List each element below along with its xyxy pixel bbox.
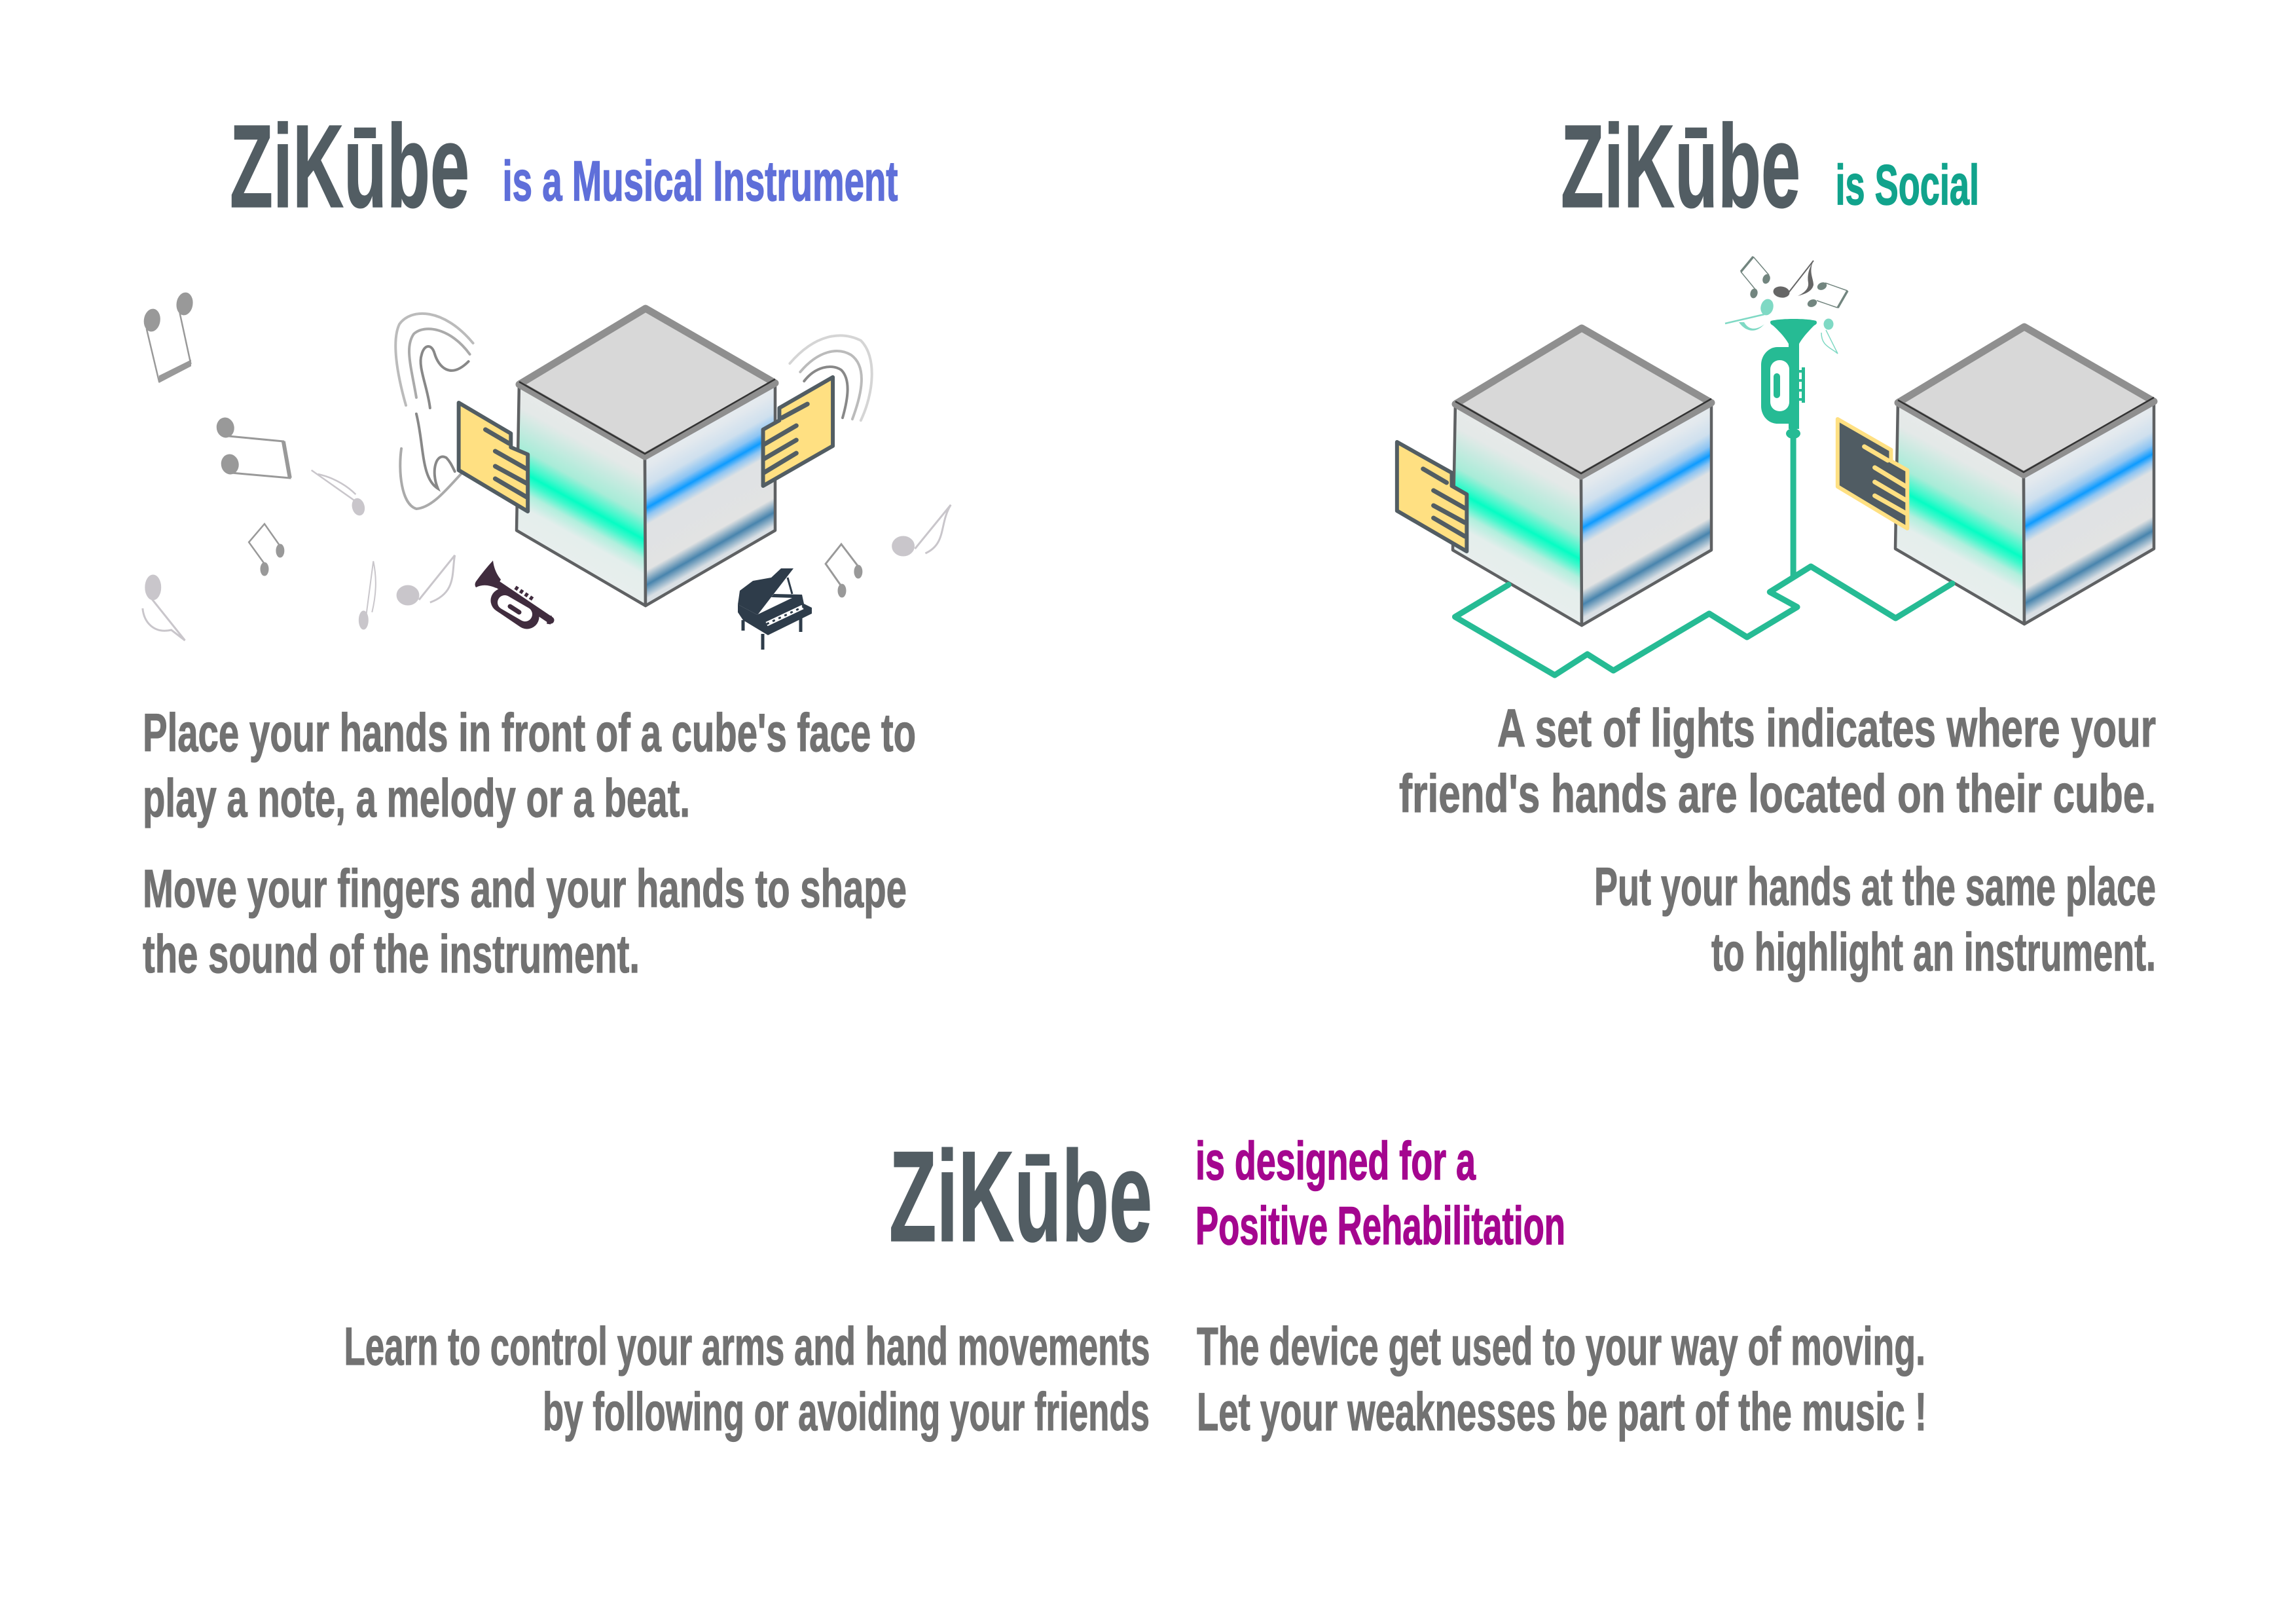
text: instructions: the sound of the instrument. <box>143 925 640 984</box>
text: right column: The device get used to your way of moving. <box>1197 1317 1925 1376</box>
icon: right hand <box>763 377 833 486</box>
icon: faint note <box>397 555 455 605</box>
text: left column <box>344 1317 1150 1442</box>
icon: faint tall note <box>359 561 376 629</box>
heading: ZiKube is Social: is Social <box>1836 154 1979 217</box>
icon: dark friend hand <box>1838 419 1907 528</box>
icon: small beamed note <box>249 524 284 576</box>
icon: faint note right <box>892 505 951 556</box>
decorative notes and sound lines <box>143 291 951 640</box>
icon: beamed note <box>215 416 290 478</box>
icon: ear sound lines <box>395 314 473 509</box>
icon: green trumpet <box>1761 319 1817 439</box>
icon: sound waves right <box>790 335 872 420</box>
text: instructions <box>1399 699 2156 982</box>
text: instructions <box>143 703 916 984</box>
icon: grand piano <box>738 568 812 650</box>
heading: ZiKube is a Musical Instrument: ZiKūbe <box>230 101 469 232</box>
icon: left hand <box>459 403 528 511</box>
text: left column: Learn to control your arms and hand movements <box>344 1317 1150 1376</box>
connection wire <box>1455 432 1952 675</box>
panel: rehabilitation <box>344 1124 1927 1442</box>
panel: social <box>1397 101 2156 982</box>
icon: trumpet <box>475 561 551 624</box>
icon: faint eighth note <box>312 470 366 517</box>
cube: right <box>1895 327 2154 624</box>
text: right column: Let your weaknesses be part of the music ! <box>1197 1382 1927 1442</box>
panel: musical instrument <box>143 101 951 984</box>
icon: yellow hand <box>1397 442 1467 551</box>
logo: ZiKube: ZiKūbe <box>889 1124 1152 1268</box>
text: instructions: play a note, a melody or a beat. <box>143 769 690 828</box>
icon: notes above trumpet <box>1725 257 1848 354</box>
heading: is designed for a Positive Rehabilitation: is designed for a <box>1195 1132 1476 1191</box>
cube: left <box>1453 328 1711 625</box>
icon: small beamed note right <box>826 544 862 597</box>
heading: ZiKube is Social: ZiKūbe <box>1561 101 1800 232</box>
heading: is designed for a Positive Rehabilitation <box>1195 1132 1565 1256</box>
text: instructions: Move your fingers and your hands to shape <box>143 859 907 919</box>
text: instructions: Place your hands in front of a cube's face to <box>143 703 916 763</box>
text: right column <box>1197 1317 1927 1442</box>
text: left column: by following or avoiding your friends <box>543 1382 1150 1442</box>
cube <box>517 308 775 606</box>
icon: faint note bottom left <box>143 575 185 640</box>
heading: ZiKube is a Musical Instrument: is a Musical Instrument <box>503 150 898 213</box>
icon: beamed note top left <box>143 291 194 382</box>
heading: ZiKube is a Musical Instrument <box>230 101 898 232</box>
heading: is designed for a Positive Rehabilitation: Positive Rehabilitation <box>1195 1196 1565 1256</box>
